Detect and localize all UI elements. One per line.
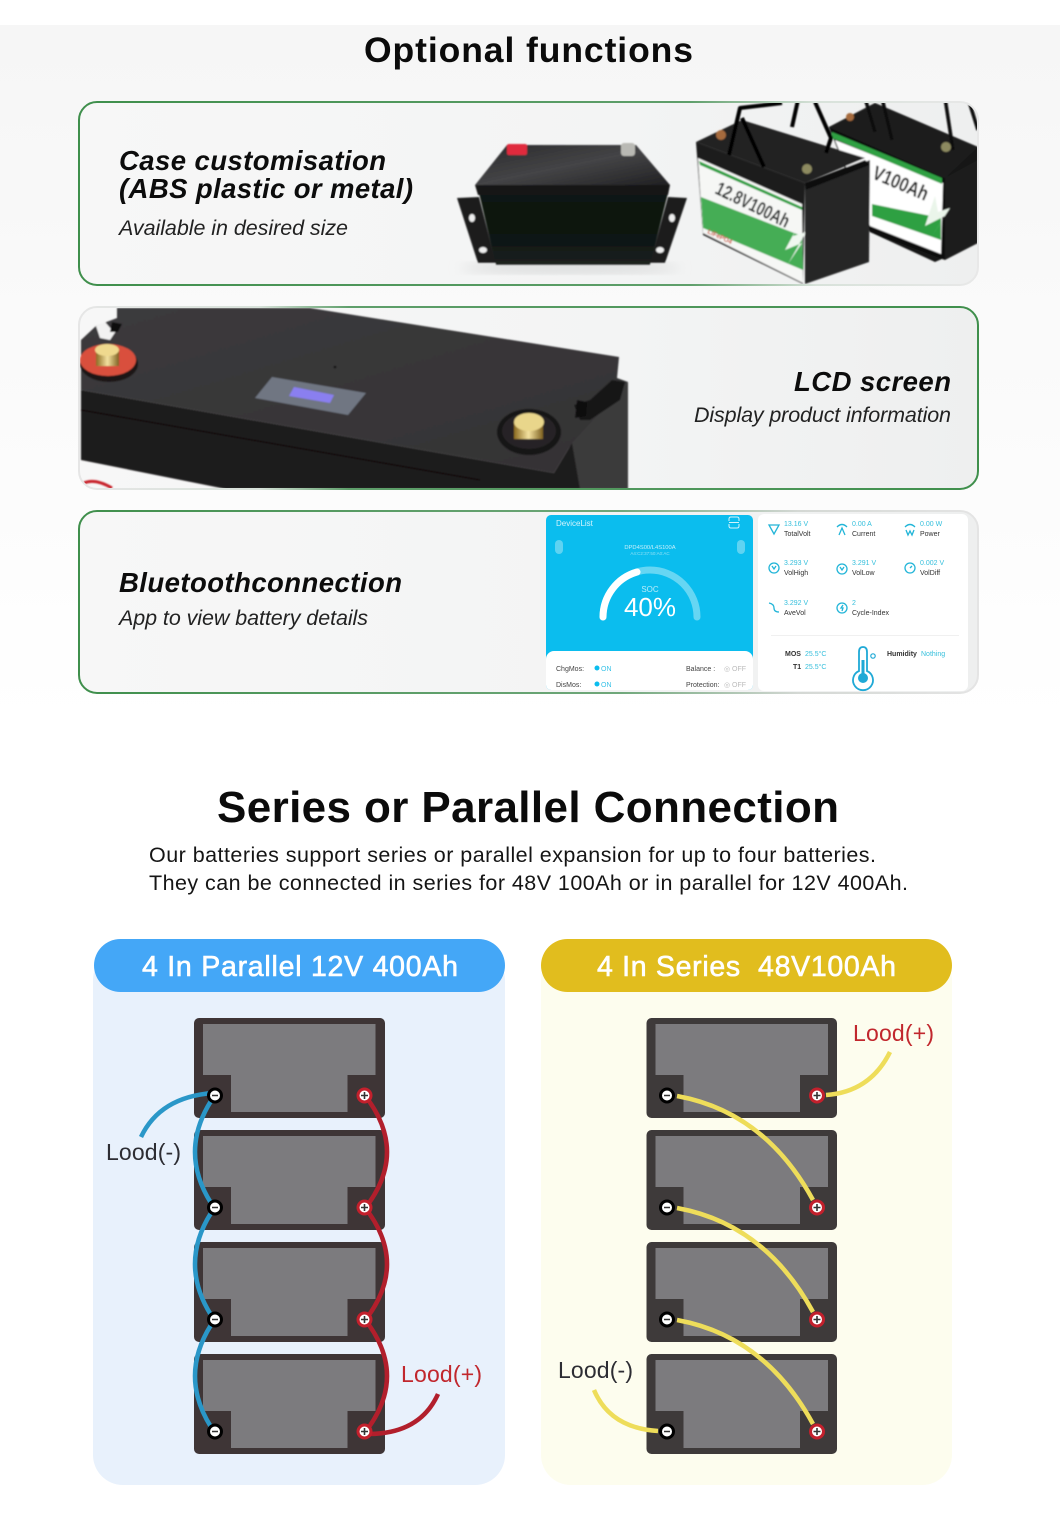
app screen: battery details: 3.293 V	[784, 560, 808, 567]
app screen: SOC gauge: ON	[601, 682, 612, 689]
description: app: App to view battery details	[117, 606, 368, 630]
batteries	[194, 1018, 385, 1454]
title: Optional functions: Optional functions	[364, 30, 693, 70]
heading: Series or Parallel Connection: Series or Parallel Connection	[217, 783, 839, 832]
border	[79, 307, 978, 489]
app screen: battery details: 0.002 V	[920, 560, 944, 567]
border	[79, 511, 978, 693]
app screen: battery details: 13.16 V	[784, 521, 808, 528]
app screen: battery details: 0.00 W	[920, 521, 943, 528]
app screen: battery details: MOS	[785, 651, 801, 658]
heading: LCD screen: LCD screen	[794, 366, 951, 397]
app screen: battery details: 2	[852, 600, 856, 607]
app screen: SOC gauge: Balance :	[686, 666, 715, 673]
app screen: battery details: Cycle-Index	[852, 610, 889, 617]
text block: intro: Our batteries support series or parallel expansion for up to four batteries.	[149, 843, 876, 867]
page background	[0, 25, 1060, 725]
app screen: SOC gauge: Protection:	[686, 682, 720, 689]
terminals	[208, 1089, 371, 1438]
app screen: battery details: VolDiff	[920, 570, 940, 577]
app screen: battery details: Humidity	[887, 651, 917, 658]
app screen: battery details: 3.291 V	[852, 560, 876, 567]
label: Lood(+): Lood(+)	[401, 1361, 482, 1387]
header: 4 In Parallel: 4 In Parallel 12V 400Ah	[142, 951, 458, 983]
app screen: battery details: AveVol	[784, 610, 806, 617]
app screen: battery details: 25.5°C	[805, 663, 826, 671]
panel: 4 in parallel	[93, 939, 505, 1485]
wires: yellow	[594, 1052, 890, 1431]
label: Lood(-): Lood(-)	[558, 1357, 633, 1383]
photo: case and batteries: LiFePO4	[706, 228, 733, 246]
label: Lood(-): Lood(-)	[106, 1139, 181, 1165]
app screen: SOC gauge	[546, 515, 753, 696]
app screen: SOC gauge: A4:C2:37:50:A0:AC	[630, 551, 670, 556]
app screen: SOC gauge: DPD4S00/L4S100A	[624, 545, 676, 551]
description: display info: Display product information	[694, 403, 951, 427]
app screen: SOC gauge: ◎ OFF	[724, 682, 746, 689]
photo: case and batteries	[457, 98, 978, 284]
heading: case customisation	[119, 145, 413, 204]
app screen: battery details: Current	[852, 531, 875, 538]
app screen: SOC gauge: DeviceList	[556, 519, 594, 528]
wires: positive red	[368, 1101, 438, 1434]
label: Lood(+): Lood(+)	[853, 1020, 934, 1046]
photo: battery with LCD	[80, 308, 628, 489]
app screen: battery details: VolLow	[852, 570, 876, 577]
app screen: SOC gauge: ◎ OFF	[724, 666, 746, 673]
app screen: SOC gauge: ChgMos:	[556, 666, 584, 673]
photo: case and batteries: V100Ah	[869, 162, 932, 205]
app screen: battery details: Nothing	[921, 651, 945, 658]
text block: intro: They can be connected in series for 48V 100Ah or in parallel for 12V 400Ah.	[149, 871, 908, 895]
batteries	[646, 1018, 837, 1454]
app screen: battery details: T1	[793, 664, 801, 671]
header: 4 In Parallel	[94, 939, 505, 992]
header: 4 In Series: 4 In Series 48V100Ah	[597, 951, 896, 983]
wires: negative blue	[141, 1093, 213, 1427]
app screen: battery details	[758, 514, 968, 691]
description: available size: Available in desired size	[117, 216, 348, 240]
app screen: battery details: 0.00 A	[852, 521, 872, 528]
heading: case customisation: (ABS plastic or metal)	[119, 173, 413, 204]
photo: case and batteries: 12.8V100Ah	[712, 178, 793, 232]
app screen: SOC gauge: DisMos:	[556, 682, 581, 689]
header: 4 In Series	[541, 939, 952, 992]
app screen: battery details: VolHigh	[784, 570, 808, 577]
app screen: SOC gauge: ON	[601, 666, 612, 673]
text block: intro	[149, 843, 908, 895]
panel: Bluetooth connection	[79, 511, 978, 696]
border	[79, 102, 978, 285]
app screen: SOC gauge: 40%	[624, 592, 676, 622]
app screen: battery details: TotalVolt	[784, 531, 811, 538]
panel: case customisation	[79, 98, 978, 285]
terminals	[660, 1089, 824, 1438]
heading: Bluetooth connection: Bluetoothconnection	[119, 567, 402, 598]
panel: LCD screen	[79, 307, 978, 489]
app screen: battery details: 3.292 V	[784, 600, 808, 607]
app screen: battery details: Power	[920, 531, 941, 538]
app screen: battery details: 25.5°C	[805, 650, 826, 658]
app screen: SOC gauge: SOC	[641, 585, 659, 594]
heading: case customisation: Case customisation	[119, 145, 386, 176]
panel: 4 in series	[541, 939, 952, 1485]
